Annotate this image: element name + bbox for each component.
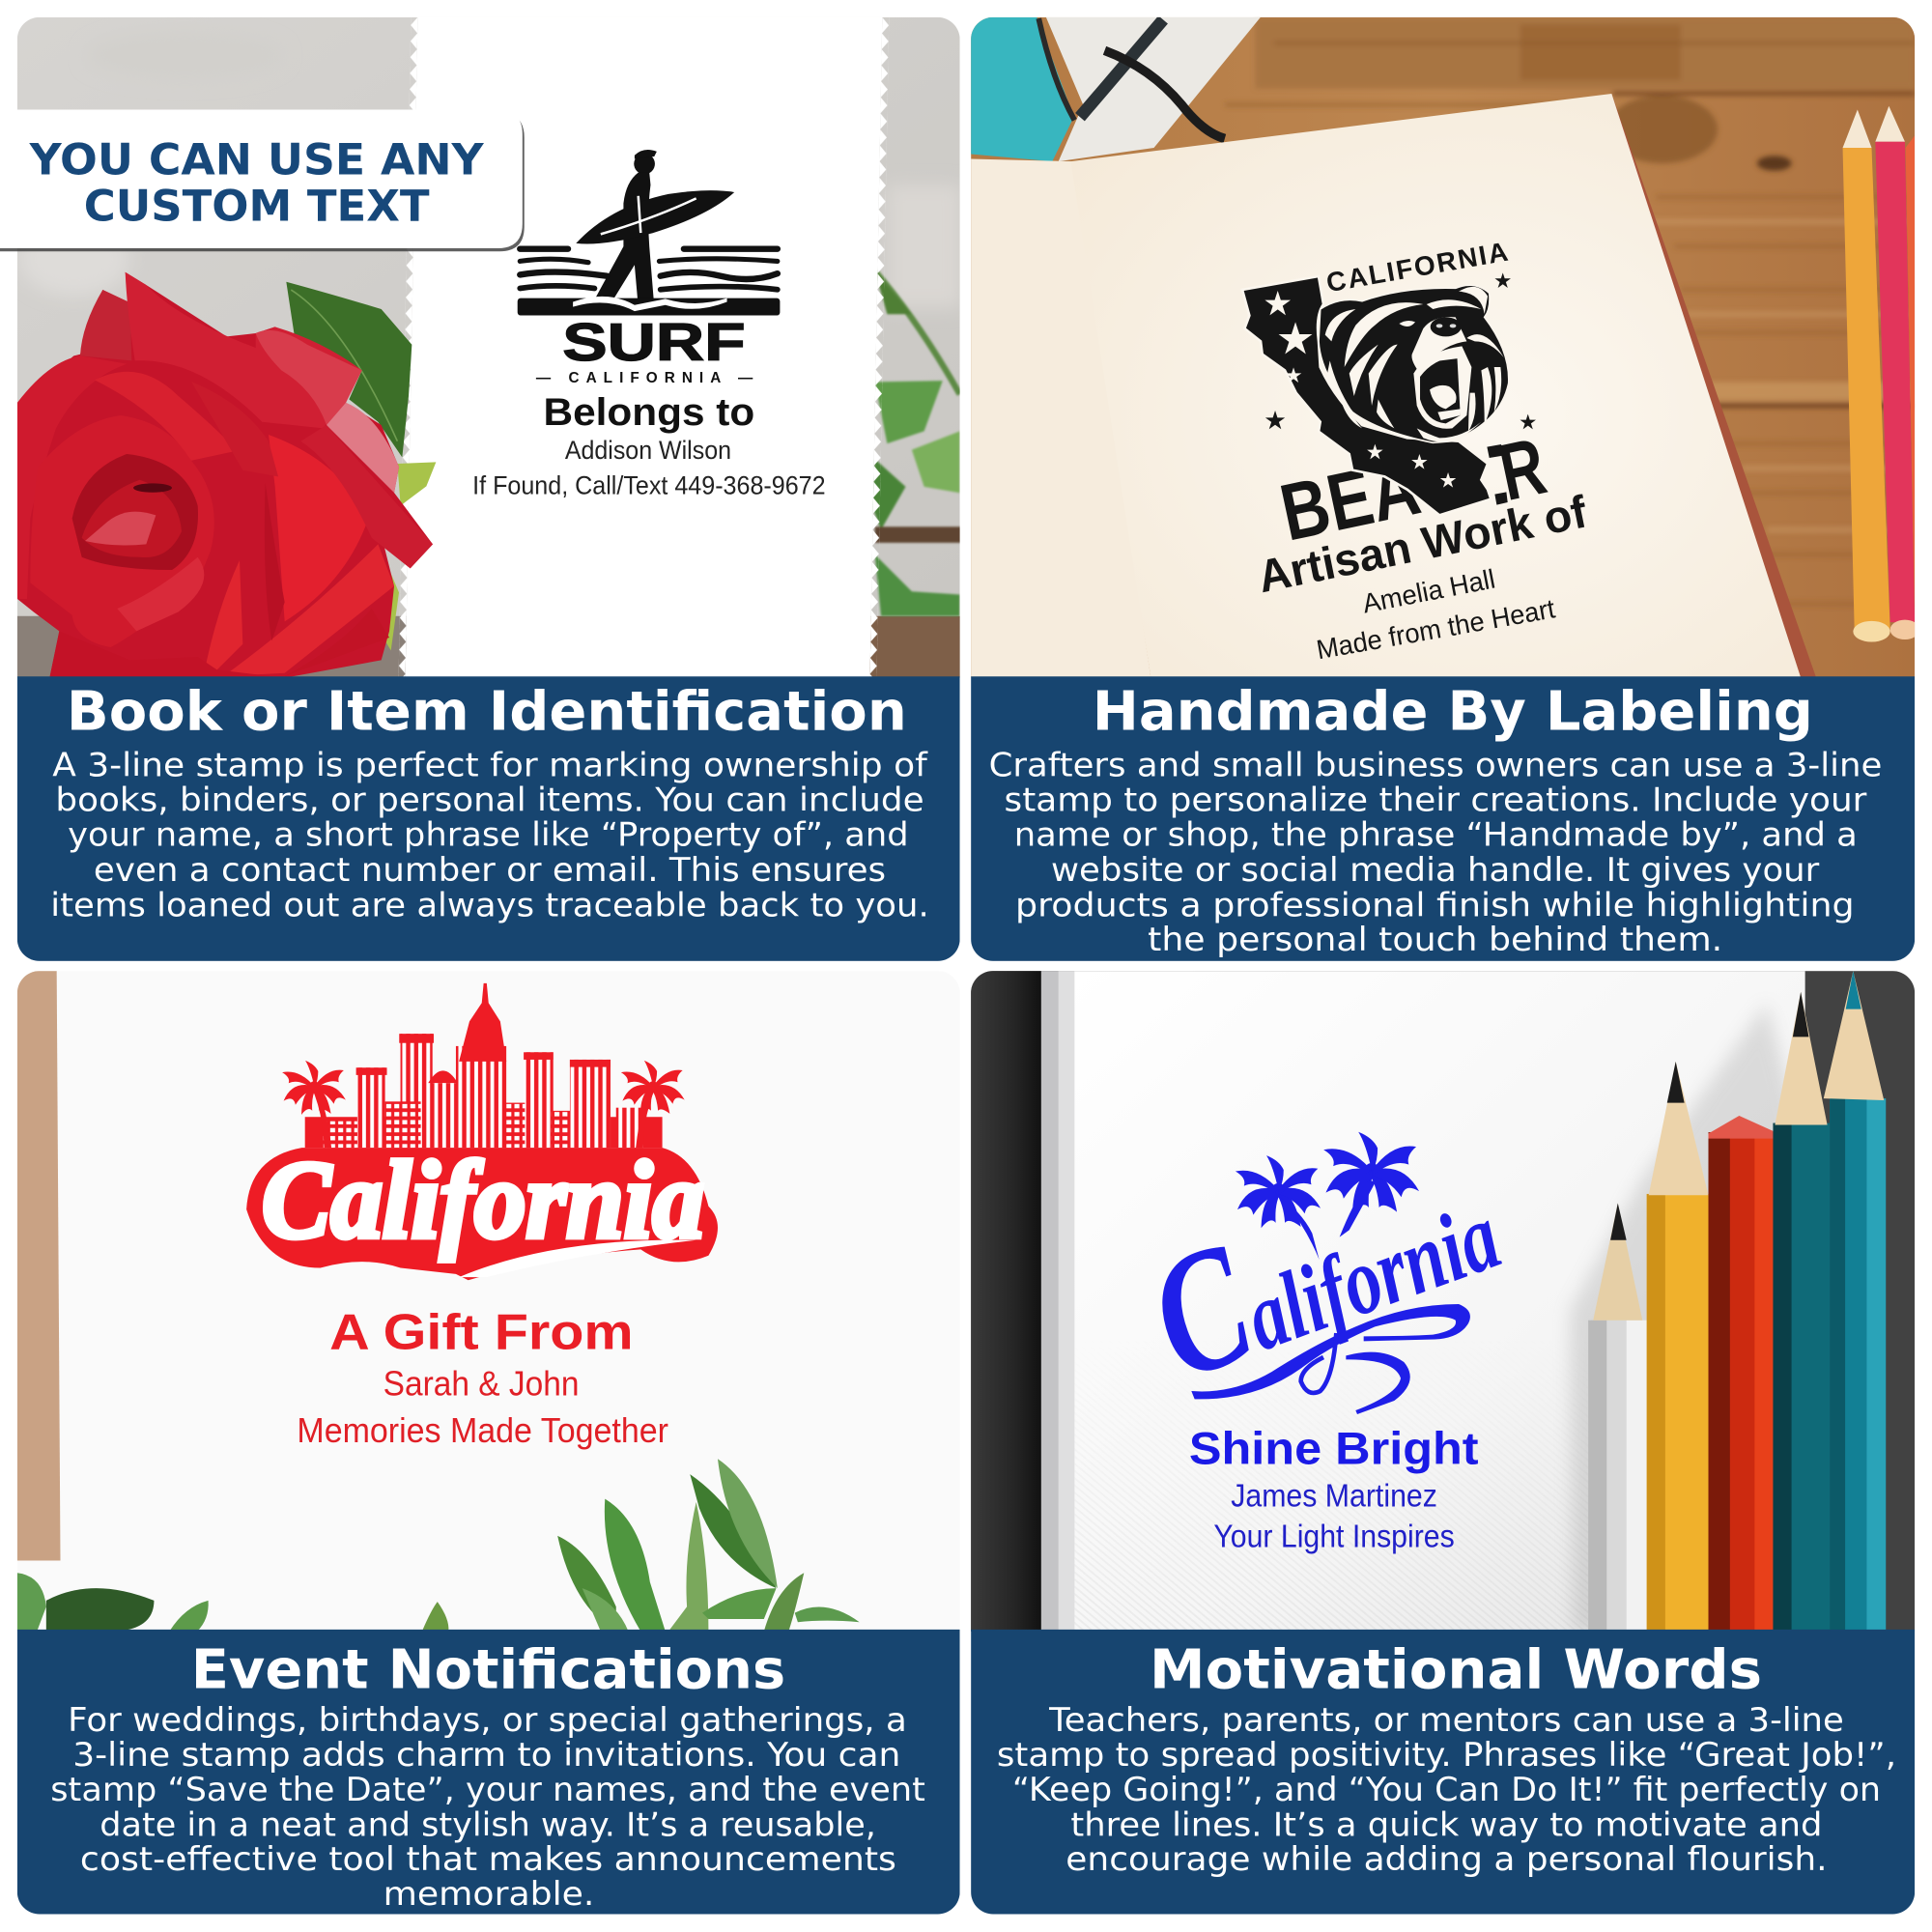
- pencils: [1588, 971, 1886, 1632]
- body text: memorable.: [384, 1875, 594, 1913]
- navy caption box: [971, 676, 1915, 961]
- body text: stamp “Save the Date”, your names, and the event: [50, 1771, 925, 1808]
- open book pages: [1611, 94, 1816, 678]
- body text: three lines. It’s a quick way to motivate and: [1070, 1806, 1822, 1844]
- stamp text: [1263, 495, 1585, 659]
- photo: rose and paper with surf stamp: Addison Wilson: [565, 436, 731, 465]
- panel: handmade by labeling: [971, 17, 1919, 961]
- paper with zigzag edges: [406, 17, 882, 678]
- body text: date in a neat and stylish way. It’s a reusable,: [99, 1806, 876, 1844]
- pencil shadows: [1570, 1003, 1805, 1632]
- body text: For weddings, birthdays, or special gatherings, a: [68, 1701, 907, 1739]
- photo: rose and paper with surf stamp: SURF: [562, 312, 746, 372]
- panel: motivational words: [971, 971, 1915, 1915]
- body text: the personal touch behind them.: [1148, 921, 1722, 958]
- navy caption box: [971, 1630, 1915, 1915]
- body text: stamp to personalize their creations. Include your: [1005, 781, 1867, 818]
- bear stamp logo: [1242, 237, 1553, 558]
- body text: encourage while adding a personal flourish.: [1065, 1840, 1828, 1878]
- body text: [50, 1701, 925, 1913]
- stamp text: [1189, 1423, 1479, 1554]
- rose flower and leaves: [17, 272, 436, 678]
- body text: cost-effective tool that makes announcements: [80, 1840, 896, 1878]
- right stem and leaves: [871, 271, 961, 616]
- blue california script logo: California: [1127, 1117, 1519, 1416]
- heading: Handmade By Labeling: [1093, 681, 1813, 744]
- body text: Crafters and small business owners can use a 3-line: [989, 747, 1882, 784]
- photo: rose and paper with surf stamp: If Found, Call/Text 449-368-9672: [472, 470, 826, 499]
- bear stamp logo: R: [1492, 421, 1553, 518]
- body text: website or social media handle. It gives your: [1051, 851, 1819, 889]
- callout: you can use any custom text: YOU CAN USE ANY: [29, 134, 484, 185]
- stamp text: Artisan Work of: [1254, 486, 1591, 603]
- heading: Motivational Words: [1150, 1638, 1762, 1701]
- photo: white paper with kraft edge, leaves and red stamp: [17, 971, 960, 1915]
- body text: items loaned out are always traceable back to you.: [50, 886, 929, 923]
- callout: you can use any custom text: CUSTOM TEXT: [84, 181, 430, 231]
- body text: your name, a short phrase like “Property of”, and: [68, 816, 909, 854]
- stamp text: Memories Made Together: [297, 1411, 668, 1450]
- photo: rose and paper with surf stamp: — CALIFORNIA —: [536, 370, 753, 386]
- callout: you can use any custom text: [0, 110, 525, 251]
- stamp text: Shine Bright: [1189, 1423, 1479, 1474]
- stamp text: James Martinez: [1231, 1478, 1437, 1514]
- photo: white paper with kraft edge, leaves and red stamp: California: [262, 1139, 704, 1262]
- white swash under lettering: [459, 1240, 696, 1277]
- body text: “Keep Going!”, and “You Can Do It!” fit perfectly on: [1012, 1771, 1881, 1808]
- body text: [997, 1701, 1896, 1878]
- body text: books, binders, or personal items. You can include: [55, 781, 924, 818]
- body text: [989, 747, 1882, 958]
- body text: 3-line stamp adds charm to invitations. You can: [72, 1736, 900, 1774]
- body text: [50, 747, 929, 923]
- photo: rose and paper with surf stamp: Belongs to: [544, 391, 754, 434]
- navy caption box: [17, 1630, 960, 1915]
- red california skyline logo: [246, 983, 718, 1280]
- stamp text: Your Light Inspires: [1213, 1519, 1455, 1554]
- body text: stamp to spread positivity. Phrases like “Great Job!”,: [997, 1736, 1896, 1774]
- body text: even a contact number or email. This ensures: [94, 851, 886, 889]
- surf stamp logo: [518, 150, 780, 316]
- stamp text: Sarah & John: [384, 1365, 579, 1404]
- panel: book or item identification: [0, 17, 961, 961]
- heading: Event Notifications: [191, 1638, 785, 1701]
- photo: open book on wood with bear stamp: [971, 17, 1919, 961]
- paper hatch texture: [1074, 1513, 1575, 1630]
- stamp text: [297, 1305, 668, 1450]
- pencils: [1843, 106, 1919, 642]
- panel: event notifications: [17, 971, 960, 1915]
- photo: notebook with pencils and blue stamp: [971, 971, 1915, 1915]
- stamp text: Made from the Heart: [1314, 593, 1557, 665]
- body text: products a professional finish while highlighting: [1015, 886, 1855, 923]
- photo: rose and paper with surf stamp: [17, 17, 961, 961]
- stamp text: Amelia Hall: [1360, 564, 1497, 618]
- stamp text: A Gift From: [329, 1305, 634, 1361]
- heading: Book or Item Identification: [67, 681, 907, 744]
- bear stamp logo: BEA: [1273, 441, 1427, 558]
- green leaves: [17, 1459, 860, 1632]
- body text: A 3-line stamp is perfect for marking ownership of: [52, 747, 928, 784]
- bear stamp logo: CALIFORNIA: [1324, 237, 1510, 298]
- body text: name or shop, the phrase “Handmade by”, and a: [1014, 816, 1858, 854]
- blue california script logo: [1162, 1132, 1502, 1414]
- body text: Teachers, parents, or mentors can use a 3-line: [1048, 1701, 1844, 1739]
- notebook and strap: [971, 17, 1074, 161]
- navy caption box: [17, 676, 960, 961]
